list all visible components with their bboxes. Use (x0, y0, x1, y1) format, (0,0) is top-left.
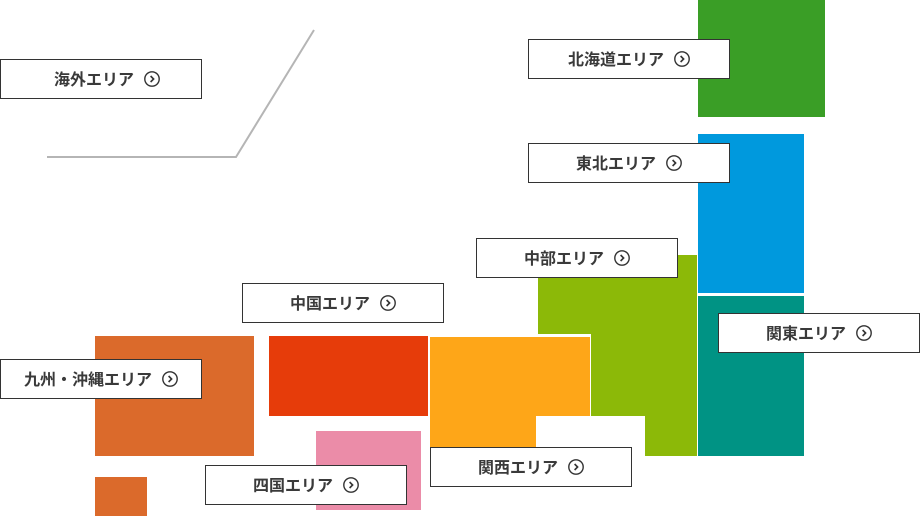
button: Tohoku area (528, 143, 730, 183)
button: Hokkaido area (528, 39, 730, 79)
button: Chugoku area: 中国エリア (290, 296, 370, 313)
button: Tohoku area: 東北エリア (576, 156, 656, 173)
button: Chubu area: 中部エリア (524, 251, 604, 268)
region: Tohoku (698, 134, 804, 293)
region: Chugoku (269, 336, 428, 416)
region: Shikoku (316, 431, 421, 510)
region: Chubu (538, 255, 697, 456)
button: Chugoku area (242, 283, 444, 323)
button: Kanto area (718, 313, 920, 353)
button: overseas area (0, 59, 202, 99)
overseas divider line (47, 30, 314, 157)
button: Hokkaido area: 北海道エリア (568, 52, 664, 69)
button: overseas area: 海外エリア (54, 72, 134, 89)
button: Shikoku area (205, 465, 407, 505)
button: Kyushu and Okinawa area: 九州・沖縄エリア (24, 372, 152, 389)
region: Kanto (698, 296, 804, 456)
region: Kansai (430, 337, 590, 460)
button: Kansai area: 関西エリア (478, 460, 558, 477)
button: Kanto area: 関東エリア (766, 326, 846, 343)
region: Kyushu (95, 336, 254, 456)
button: Kyushu and Okinawa area (0, 359, 202, 399)
button: Shikoku area: 四国エリア (253, 478, 333, 495)
button: Chubu area (476, 238, 678, 278)
region: Hokkaido (698, 0, 825, 117)
region: Okinawa (95, 477, 147, 516)
button: Kansai area (430, 447, 632, 487)
